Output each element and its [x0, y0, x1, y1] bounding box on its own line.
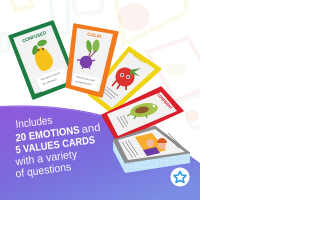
card: calm: [66, 24, 118, 97]
question box: be confused?: [42, 78, 58, 86]
card deck: [113, 126, 190, 173]
card title: ANGRY: [132, 53, 147, 65]
headline text: 20 EMOTIONS: [15, 124, 80, 144]
icon: beet character: [77, 39, 100, 69]
headline text: [14, 115, 101, 180]
icon: tomato character: [112, 68, 141, 90]
text lines: [122, 140, 138, 158]
headline text: with a variety: [14, 148, 78, 169]
faded background cards: [0, 0, 215, 128]
question box: [72, 73, 100, 91]
card: confused: [9, 21, 77, 99]
purple panel: [0, 105, 200, 200]
card: red confident: [102, 87, 183, 141]
headline text: and: [81, 122, 101, 136]
deck side: [113, 140, 190, 173]
text lines: [117, 115, 128, 128]
text lines: [103, 87, 118, 99]
icon: star: [174, 172, 186, 182]
icon: lemon character: [31, 38, 53, 71]
icon: children: [135, 133, 167, 156]
question box: How do you calm: [76, 76, 95, 82]
question box: [36, 68, 68, 92]
top card: [113, 126, 190, 163]
logo badge: [170, 168, 190, 186]
dashed stitch line: [0, 106, 100, 116]
card title: CALM: [87, 32, 102, 39]
question box: How does it feel to: [40, 71, 61, 81]
headline text: Includes: [15, 115, 54, 131]
card: yellow angry: [89, 47, 161, 113]
icon: avocado character: [127, 101, 159, 119]
card title: CONFIDENT: [156, 92, 174, 111]
card title: CONFUSED: [22, 30, 47, 43]
headline text: 5 VALUES CARDS: [15, 134, 96, 156]
corner number: 1: [12, 37, 15, 42]
infographic canvas: [0, 0, 200, 200]
headline text: of questions: [15, 161, 72, 180]
question box: yourself down?: [75, 80, 92, 87]
